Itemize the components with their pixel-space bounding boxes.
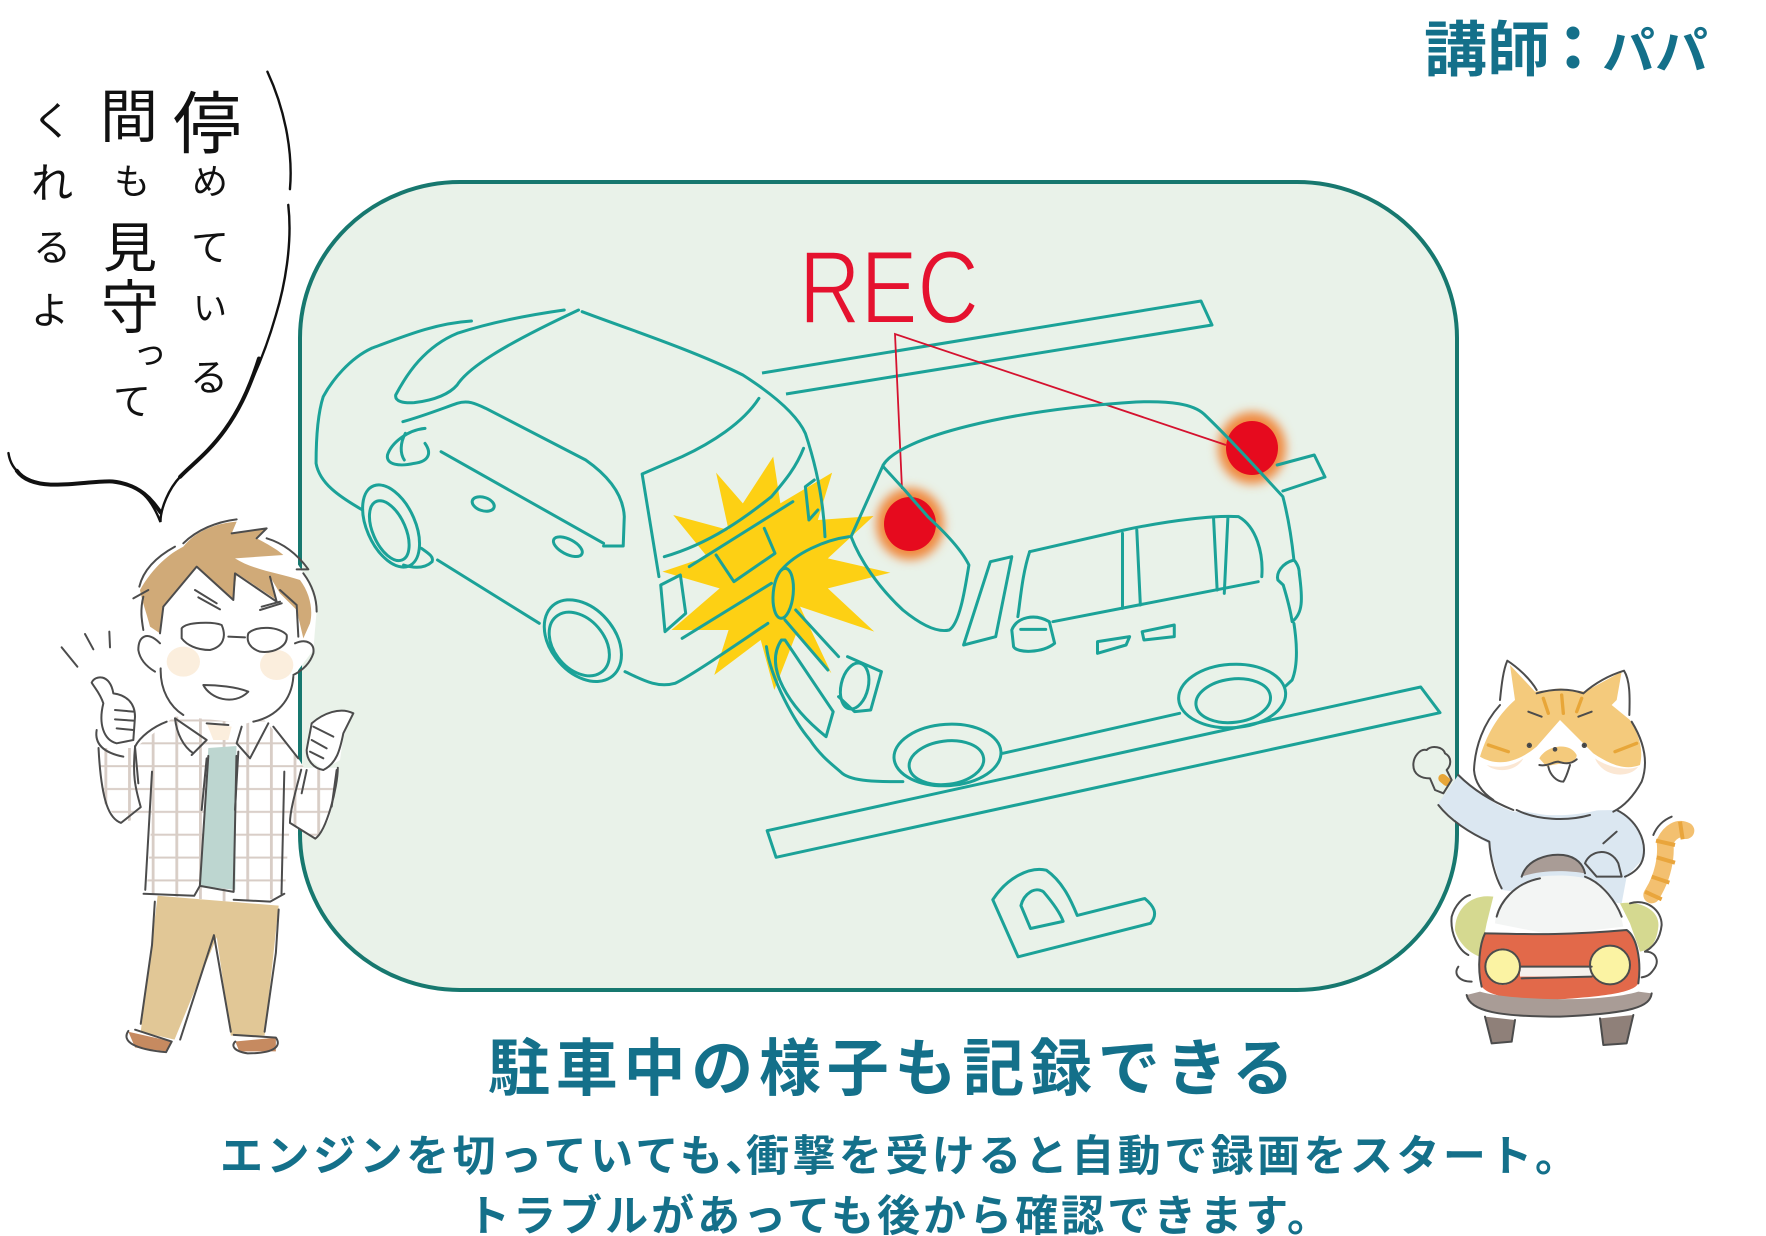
cat hand and stripes: [1443, 695, 1637, 782]
red connector lines from REC: [895, 334, 1226, 489]
speech bubble handwritten text: も: [114, 153, 150, 205]
speech bubble handwritten text: [31, 69, 241, 426]
yellow impact star: [662, 457, 890, 690]
dad lower body: [99, 716, 338, 1053]
speech bubble handwritten text: て: [113, 371, 151, 426]
speech bubble handwritten text: 間: [100, 70, 158, 154]
speech bubble handwritten text: め: [192, 153, 228, 205]
title: instructor: [1424, 17, 1708, 84]
REC label: REC: [799, 230, 979, 346]
speech bubble handwritten text: 見: [103, 204, 157, 283]
speech bubble handwritten text: る: [33, 217, 71, 272]
left car line drawing: [316, 310, 825, 695]
character: cat driving a toy car: [1413, 661, 1686, 1045]
character: dad: [62, 519, 353, 1053]
speech bubble handwritten text: く: [32, 89, 72, 147]
cat head: [1475, 662, 1644, 815]
speech bubble handwritten text: る: [190, 347, 228, 402]
dad head and hands: [62, 519, 353, 810]
speech bubble handwritten text: れ: [31, 150, 73, 211]
panel: parking illustration background: [300, 182, 1457, 990]
cat body sweater: [1438, 775, 1645, 903]
speech bubble handwritten text: っ: [133, 325, 167, 374]
heading: 駐車中の様子も記録できる: [488, 1035, 1294, 1104]
cat outlines: [1413, 661, 1672, 1045]
cat head orange patches: [1480, 665, 1641, 767]
speech bubble handwritten text: い: [193, 281, 227, 330]
speech bubble handwritten text: て: [191, 217, 229, 272]
parking line: upper: [762, 301, 1212, 394]
right car line drawing: [766, 402, 1440, 857]
speech bubble handwritten text: 停: [173, 69, 241, 168]
body text line 1: [220, 1133, 1578, 1181]
title: instructor: 講師: [1424, 17, 1550, 84]
toy car: [1455, 855, 1658, 1045]
parking mark P: [993, 869, 1155, 957]
speech bubble handwritten text: よ: [31, 280, 69, 335]
title: instructor: パパ: [1602, 24, 1708, 80]
cat tail: [1645, 822, 1686, 899]
speech bubble handwritten text: 守: [101, 261, 159, 345]
body text line 1: 衝撃を受けると自動で録画をスタート。: [746, 1133, 1578, 1181]
body text line 1: エンジンを切っていても、: [220, 1133, 768, 1181]
speech bubble outline: [8, 72, 291, 522]
REC camera glow lights: [876, 412, 1286, 560]
